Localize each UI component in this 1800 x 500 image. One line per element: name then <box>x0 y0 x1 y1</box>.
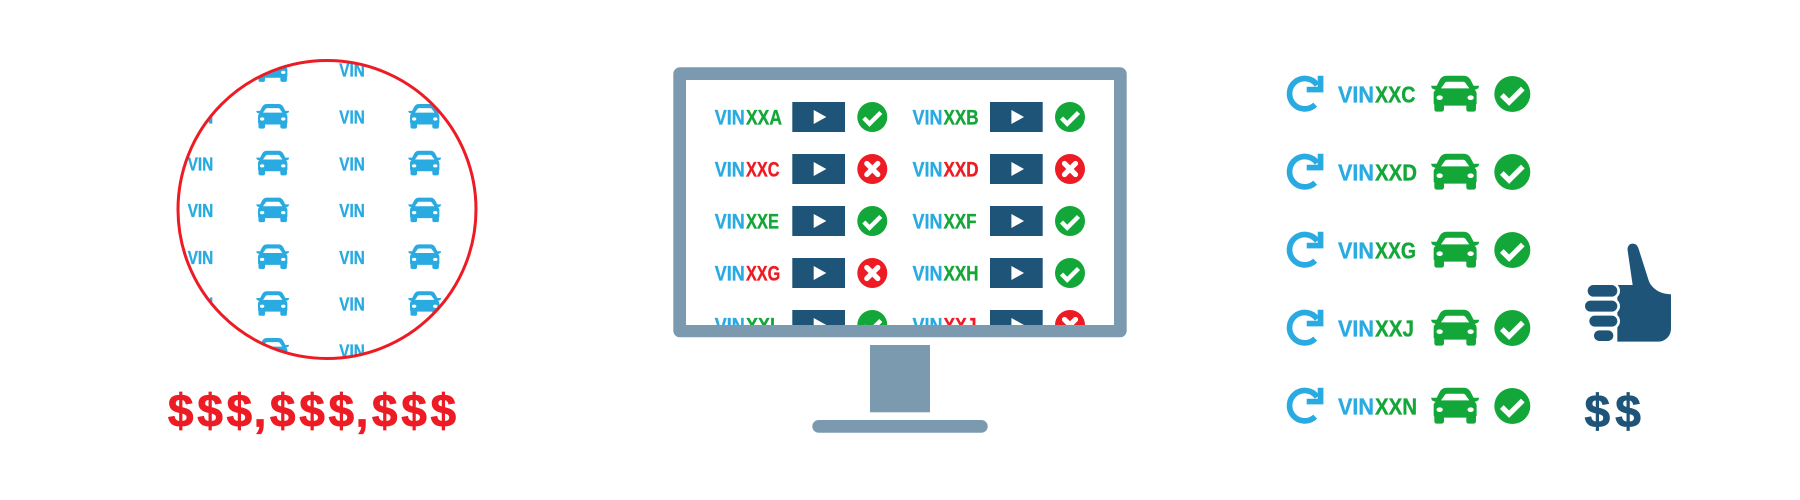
row: VINXXH: VIN <box>912 263 942 286</box>
monitor stand <box>870 345 930 412</box>
row: VINXXJ verified <box>1290 310 1530 346</box>
row: VINXXD <box>912 154 1085 184</box>
large red dollar amount: $$$,$$$,$$$ <box>168 384 456 436</box>
row: VINXXA <box>715 102 887 132</box>
row: VINXXC <box>715 154 887 184</box>
row: VINXXI <box>714 310 888 325</box>
row: VINXXJ verified: XXJ <box>1375 316 1414 342</box>
row: VINXXC: XXC <box>746 159 780 182</box>
pattern of VIN labels and cars: VIN <box>339 201 365 221</box>
monitor frame <box>673 67 1127 337</box>
pattern of VIN labels and cars: VIN <box>339 154 365 174</box>
pattern of VIN labels and cars: VIN <box>339 341 365 361</box>
row: VINXXF: VIN <box>912 211 942 234</box>
row: VINXXG verified: VIN <box>1338 238 1374 264</box>
pattern of VIN labels and cars: VIN <box>339 108 365 128</box>
pattern of VIN labels and cars: VIN <box>339 248 365 268</box>
row: VINXXE <box>715 206 887 236</box>
row: VINXXD verified <box>1290 154 1530 190</box>
row: VINXXA: XXA <box>746 107 782 130</box>
red lens circle <box>178 60 476 358</box>
row: VINXXJ: XXJ <box>944 315 976 338</box>
row: VINXXC verified: XXC <box>1375 82 1416 108</box>
row: VINXXC verified: VIN <box>1338 82 1374 108</box>
row: VINXXG <box>715 258 887 288</box>
row: VINXXD verified: XXD <box>1375 160 1417 186</box>
row: VINXXA: VIN <box>715 107 745 130</box>
row: VINXXJ verified: VIN <box>1338 316 1374 342</box>
row: VINXXD: XXD <box>944 159 978 182</box>
row: VINXXG: XXG <box>746 263 780 286</box>
row: VINXXC verified <box>1290 76 1530 112</box>
pattern of VIN labels and cars: VIN <box>188 154 213 174</box>
row: VINXXF: XXF <box>944 211 977 234</box>
row: VINXXH: XXH <box>944 263 978 286</box>
row: VINXXB: XXB <box>944 107 978 130</box>
pattern of VIN labels and cars <box>188 57 441 363</box>
row: VINXXG verified <box>1290 232 1530 268</box>
row: VINXXH <box>912 258 1085 288</box>
row: VINXXB: VIN <box>912 107 942 130</box>
screen rows of VIN videos <box>715 102 1085 340</box>
row: VINXXD: VIN <box>912 159 942 182</box>
row: VINXXI: XXI <box>746 315 775 338</box>
row: VINXXG: VIN <box>715 263 745 286</box>
row: VINXXG verified: XXG <box>1375 238 1416 264</box>
panel: verified VIN list <box>1290 76 1530 424</box>
pattern of VIN labels and cars: VIN <box>188 108 213 128</box>
row: VINXXE: VIN <box>715 211 745 234</box>
monitor base <box>812 420 988 433</box>
row: VINXXE: XXE <box>746 211 779 234</box>
icon: thumbs up <box>1585 244 1671 342</box>
panel: VIN and car population in lens <box>178 57 476 363</box>
row: VINXXN verified: VIN <box>1338 394 1374 420</box>
pattern of VIN labels and cars: VIN <box>188 248 213 268</box>
row: VINXXD verified: VIN <box>1338 160 1374 186</box>
pattern of VIN labels and cars: VIN <box>339 61 365 81</box>
row: VINXXI: VIN <box>715 315 745 338</box>
pattern of VIN labels and cars: VIN <box>339 295 365 315</box>
row: VINXXJ: VIN <box>912 315 942 338</box>
pattern of VIN labels and cars: VIN <box>188 201 213 221</box>
small dark dollar amount: $$ <box>1585 385 1641 437</box>
row: VINXXF <box>912 206 1085 236</box>
row: VINXXN verified <box>1290 388 1530 424</box>
row: VINXXB <box>912 102 1085 132</box>
pattern of VIN labels and cars: VIN <box>188 295 213 315</box>
row: VINXXJ <box>912 310 1085 325</box>
row: VINXXC: VIN <box>715 159 745 182</box>
row: VINXXN verified: XXN <box>1375 394 1417 420</box>
panel: computer monitor <box>673 67 1127 433</box>
